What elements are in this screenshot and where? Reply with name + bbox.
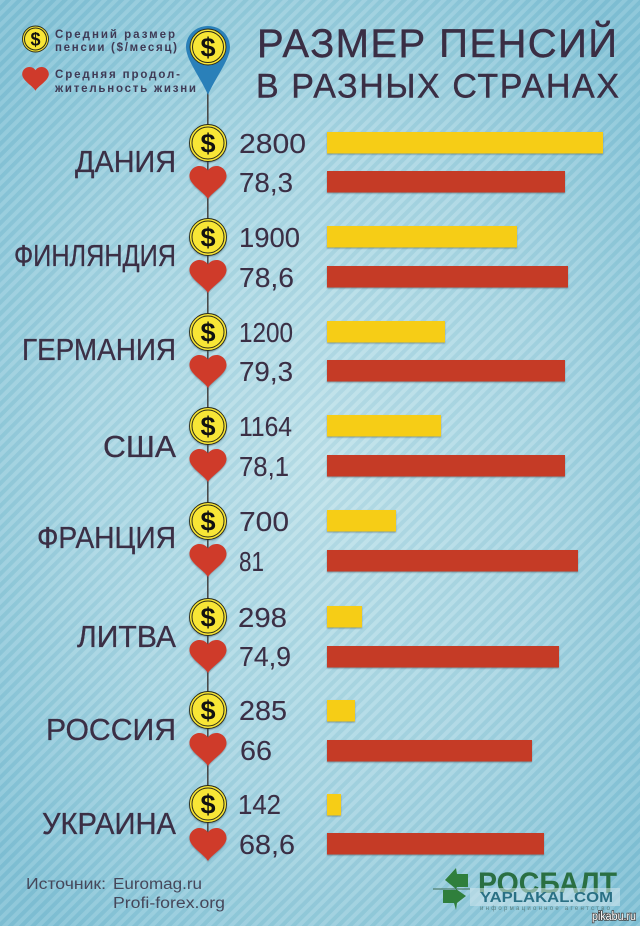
watermark: yaplakal: YAPLAKAL.COM bbox=[480, 889, 613, 906]
row: Дания: ДАНИЯ bbox=[75, 144, 176, 179]
row: Украина bbox=[42, 786, 544, 861]
title bbox=[256, 20, 619, 106]
title: РАЗМЕР ПЕНСИЙ bbox=[257, 20, 617, 66]
watermark: pikabu: pikabu.ru bbox=[592, 911, 636, 923]
row: Финляндия bbox=[14, 218, 568, 293]
legend bbox=[22, 26, 196, 95]
row: Франция bbox=[37, 502, 578, 577]
icon: map pin: $ bbox=[200, 32, 216, 62]
row: Финляндия: $ bbox=[200, 222, 216, 252]
row: Германия bbox=[22, 314, 565, 388]
legend text: pension: Средний размер bbox=[55, 29, 175, 41]
source text: Euromag.ru bbox=[113, 876, 202, 893]
source text: Profi-forex.org bbox=[113, 895, 225, 912]
row: Дания: 2800 bbox=[239, 128, 306, 159]
logo text: РОСБАЛТ bbox=[478, 867, 617, 900]
row: Германия: 1200 bbox=[239, 317, 293, 348]
row: Финляндия: 78,6 bbox=[239, 262, 294, 293]
row: Литва: $ bbox=[200, 602, 216, 632]
row: Россия: $ bbox=[200, 696, 216, 726]
row: США bbox=[103, 408, 565, 482]
legend text: pension: пенсии ($/месяц) bbox=[55, 42, 177, 54]
row: Франция: ФРАНЦИЯ bbox=[37, 520, 176, 555]
row: Дания: 78,3 bbox=[239, 167, 293, 198]
icon: legend coin: $ bbox=[30, 30, 41, 50]
legend text: life expectancy: жительность жизни bbox=[54, 83, 196, 95]
row: Франция: 700 bbox=[239, 506, 289, 537]
row: Россия: 66 bbox=[240, 735, 272, 766]
icon: legend coin bbox=[22, 26, 48, 52]
row: Германия: ГЕРМАНИЯ bbox=[22, 332, 176, 367]
row: США: 78,1 bbox=[239, 451, 289, 482]
row: Франция: 81 bbox=[239, 546, 264, 577]
row: Украина: 142 bbox=[238, 789, 281, 820]
row: Литва bbox=[77, 598, 559, 673]
row: Дания bbox=[75, 124, 603, 199]
icon: legend heart bbox=[22, 67, 49, 91]
row: США: США bbox=[103, 429, 176, 464]
legend text: life expectancy: Средняя продол- bbox=[55, 69, 180, 81]
row: США: $ bbox=[200, 412, 216, 442]
row: Россия: РОССИЯ bbox=[46, 712, 176, 747]
row: Франция: $ bbox=[200, 506, 216, 536]
icon: logo arrows bbox=[433, 868, 470, 910]
row: Литва: 74,9 bbox=[239, 641, 291, 672]
row: Финляндия: 1900 bbox=[239, 222, 300, 253]
source text: Источник: bbox=[26, 876, 106, 893]
logo: Росбалт bbox=[433, 867, 636, 923]
row: Германия: 79,3 bbox=[239, 356, 293, 387]
row: Россия bbox=[46, 692, 532, 766]
row: Россия: 285 bbox=[239, 695, 287, 726]
icon: map pin bbox=[186, 26, 230, 95]
logo tagline: информационное агентство bbox=[480, 906, 611, 912]
row: Украина: $ bbox=[200, 790, 216, 820]
row: Дания: $ bbox=[200, 128, 216, 158]
row: США: 1164 bbox=[239, 411, 292, 442]
row: Украина: 68,6 bbox=[239, 829, 295, 860]
timeline line bbox=[207, 90, 209, 860]
row: Литва: 298 bbox=[238, 602, 287, 633]
row: Германия: $ bbox=[200, 318, 216, 348]
row: Украина: УКРАИНА bbox=[42, 806, 176, 841]
row: Финляндия: ФИНЛЯНДИЯ bbox=[14, 238, 176, 273]
row: Литва: ЛИТВА bbox=[77, 619, 176, 654]
title: В РАЗНЫХ СТРАНАХ bbox=[256, 68, 619, 106]
